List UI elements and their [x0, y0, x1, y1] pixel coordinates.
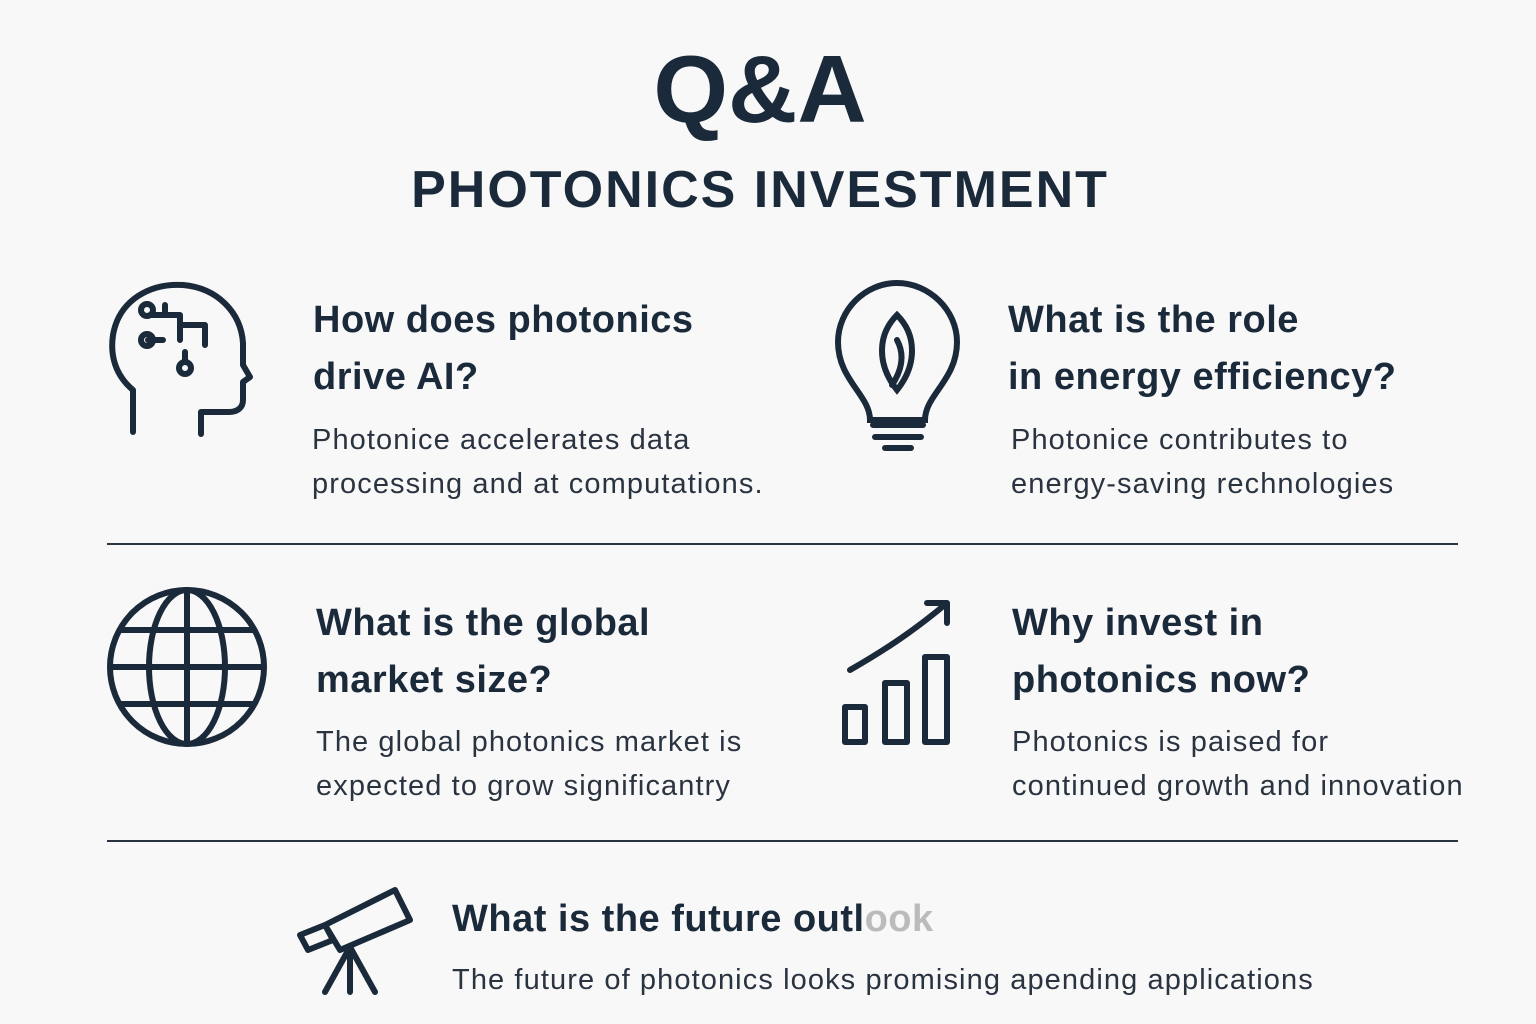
answer [312, 424, 764, 500]
panel: energy [835, 280, 1397, 500]
panel: AI [109, 282, 764, 500]
answer: The future of photonics looks promising apending applications [452, 964, 1314, 996]
answer: processing and at computations. [312, 468, 764, 500]
subtitle: PHOTONICS INVESTMENT [411, 161, 1109, 219]
question: in energy efficiency? [1008, 356, 1397, 398]
question: photonics now? [1012, 659, 1310, 701]
question: What is the future outlook [452, 898, 934, 940]
panel: invest [842, 600, 1464, 802]
question [1012, 602, 1310, 701]
answer: Photonice contributes to [1011, 424, 1349, 456]
question: Why invest in [1012, 602, 1263, 644]
answer: continued growth and innovation [1012, 770, 1464, 802]
icon: growth chart [842, 600, 950, 745]
answer: energy-saving rechnologies [1011, 468, 1394, 500]
icon: telescope [297, 887, 413, 995]
answer: Photonics is paised for [1012, 726, 1329, 758]
question: market size? [316, 659, 552, 701]
title: Q&A [653, 36, 867, 143]
panel: market [107, 587, 742, 802]
answer: The global photonics market is [316, 726, 742, 758]
question: drive AI? [313, 356, 479, 398]
icon: bulb [835, 280, 960, 451]
icon: globe [107, 587, 267, 747]
question [316, 602, 650, 701]
question: How does photonics [313, 299, 694, 341]
question [1008, 299, 1397, 398]
question: What is the role [1008, 299, 1299, 341]
question: What is the global [316, 602, 650, 644]
answer: Photonice accelerates data [312, 424, 690, 456]
question [313, 299, 694, 398]
answer [1011, 424, 1394, 500]
answer: expected to grow significantry [316, 770, 731, 802]
answer [316, 726, 742, 802]
answer [1012, 726, 1464, 802]
panel: future [297, 887, 1314, 996]
icon: head [109, 282, 253, 437]
